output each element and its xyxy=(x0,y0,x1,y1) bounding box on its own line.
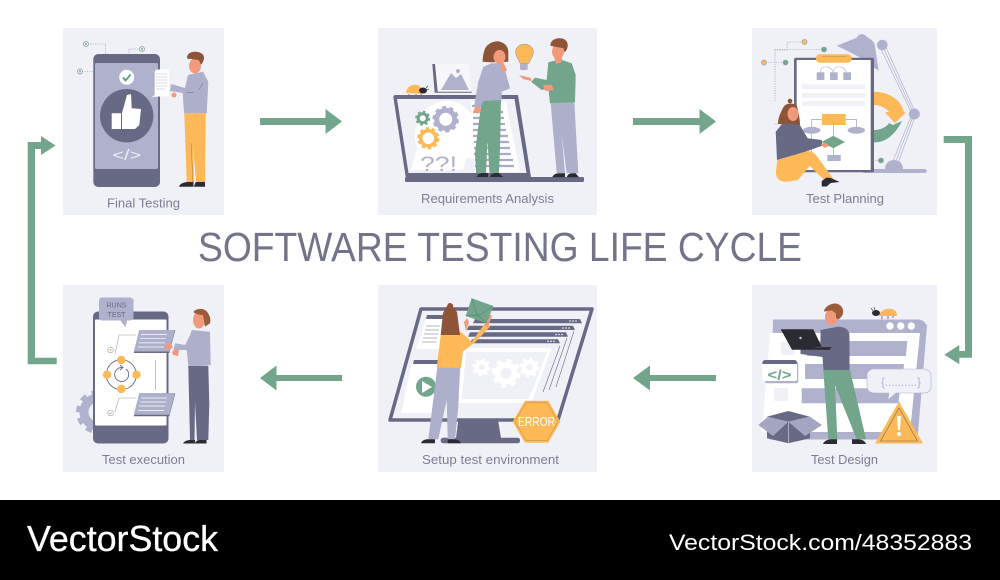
brand logo: VectorStock xyxy=(27,518,219,559)
panel: requirements analysis xyxy=(378,28,597,215)
icon: phone screen xyxy=(93,312,168,444)
icon: error hexagon: ERROR xyxy=(518,415,555,429)
icon: envelope xyxy=(466,298,493,323)
icon: beetle xyxy=(871,307,897,319)
icon: phone with thumbs up: </> xyxy=(112,147,142,164)
icon: cycle arrows xyxy=(874,92,906,142)
panel: test planning xyxy=(752,28,937,215)
figure: woman with cards xyxy=(165,309,211,444)
icon: laptop with thoughts xyxy=(393,95,584,182)
icon: speech bubble code xyxy=(867,369,931,400)
arrow: design to environment xyxy=(633,366,716,390)
icon: warning triangle xyxy=(875,402,923,444)
video window xyxy=(401,360,440,413)
figure: man with laptop xyxy=(781,303,866,444)
settings window xyxy=(458,348,552,403)
label: test execution: Test execution xyxy=(102,452,185,467)
icon: picture frame xyxy=(432,64,472,93)
figure: seated woman xyxy=(776,99,840,186)
icon: phone with thumbs up xyxy=(78,42,160,187)
icon: open box xyxy=(758,411,822,443)
callout: runs test xyxy=(99,298,134,328)
figure: woman thinking xyxy=(474,41,510,177)
icon: app window xyxy=(762,320,927,440)
stock url: VectorStock.com/48352883 xyxy=(669,530,972,555)
gears xyxy=(416,107,458,148)
window title bars xyxy=(426,315,582,392)
callout: runs test: TEST xyxy=(108,312,126,319)
icon: connector dots xyxy=(762,40,884,163)
icon: cycle diagram xyxy=(103,356,141,393)
footer bar xyxy=(0,500,1000,580)
arrow: execution to final testing xyxy=(28,136,57,364)
callout: runs test: RUNS xyxy=(107,302,127,310)
icon: speech bubble code: {..........} xyxy=(881,375,921,389)
card: lower xyxy=(134,393,175,416)
figure: woman from behind xyxy=(421,303,492,443)
panel: test execution xyxy=(63,285,224,472)
card: upper xyxy=(134,330,175,353)
arrow: planning to design xyxy=(944,136,972,364)
icon: clipboard with flowchart xyxy=(794,54,874,172)
label: requirements analysis: Requirements Analysis xyxy=(421,191,554,206)
label: test design: Test Design xyxy=(811,452,878,467)
figure: man gesturing xyxy=(519,38,579,177)
icon: code window xyxy=(762,360,798,383)
icon: laptop with thoughts: ??! xyxy=(420,153,457,176)
arrow: final testing to requirements xyxy=(260,109,342,134)
icon: desk lamp xyxy=(837,34,927,173)
figure: man holding document xyxy=(152,52,208,187)
label: test planning: Test Planning xyxy=(806,191,884,206)
label: setup test environment: Setup test environment xyxy=(422,452,559,467)
document lines xyxy=(471,102,520,172)
panel: test design xyxy=(752,285,937,472)
icon: gear xyxy=(78,392,118,432)
label: final testing: Final Testing xyxy=(107,196,180,210)
panel: setup test environment xyxy=(378,285,597,472)
arrow: environment to execution xyxy=(260,366,342,390)
icon: error hexagon xyxy=(513,401,560,443)
panel: final testing xyxy=(63,28,224,215)
arrow: requirements to planning xyxy=(633,109,716,134)
title: SOFTWARE TESTING LIFE CYCLE xyxy=(198,224,802,270)
text window xyxy=(416,319,454,349)
icon: light bulb xyxy=(516,44,533,70)
icon: monitor xyxy=(390,309,592,443)
icon: beetle xyxy=(406,85,429,97)
icon: code window: </> xyxy=(768,366,792,382)
